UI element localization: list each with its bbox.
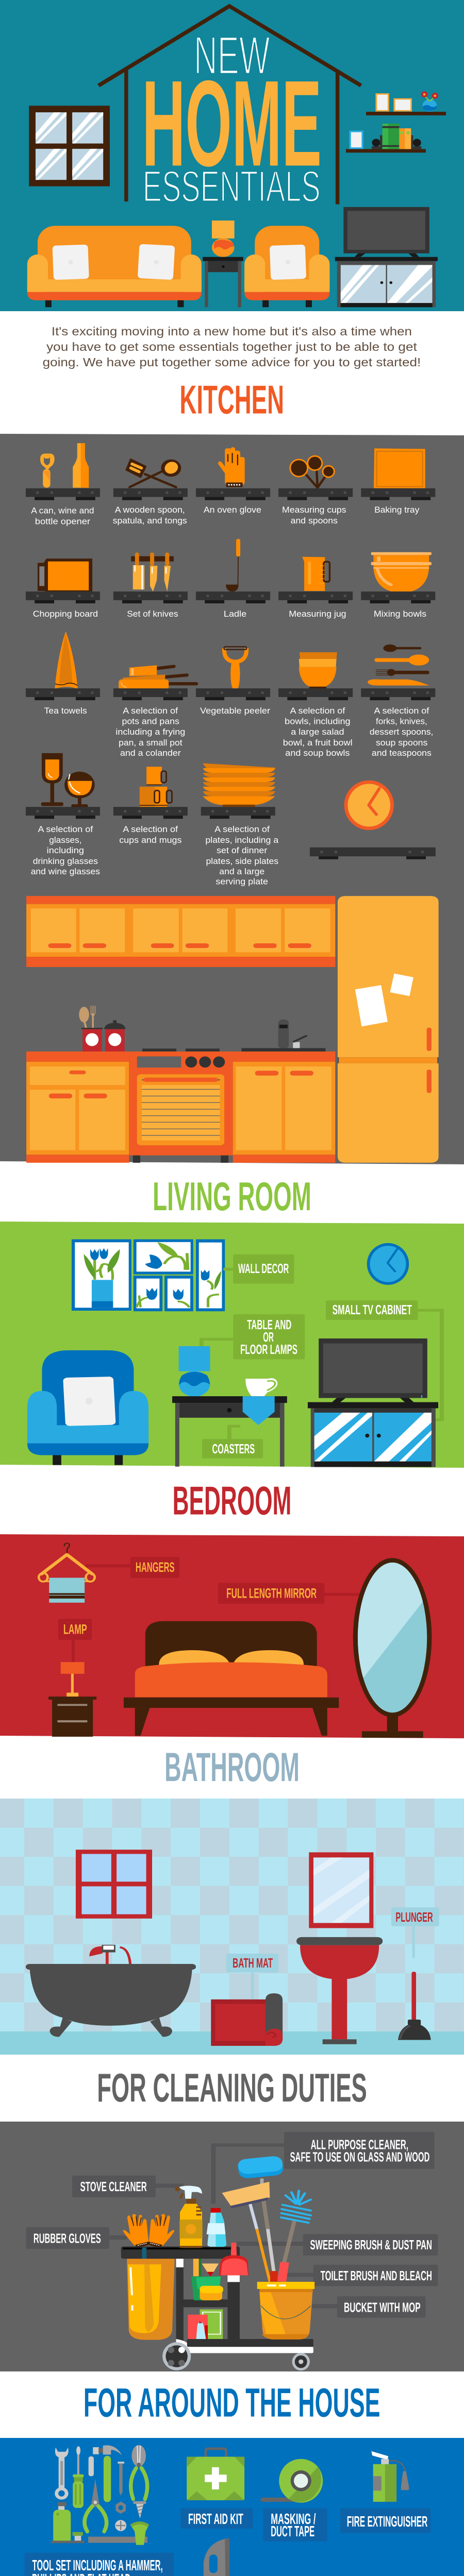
callout: lamp: LAMP [63,1621,87,1637]
section: bathroom illustration [0,1799,464,2055]
label: and spoons [291,516,338,526]
icon: wall art frames [72,1239,225,1311]
title: ESSENTIALS: ESSENTIALS [143,162,321,211]
label: and a colander [120,748,181,758]
label: A selection of [123,706,178,716]
icon: measuring spoons [289,455,335,488]
label: bottle opener [35,517,90,526]
icon: yellow bag [127,2259,175,2340]
icon: cutlery [368,645,429,686]
label: cups and mugs [119,835,181,845]
callout: table and or floor lamps: TABLE AND [247,1317,291,1332]
label [31,506,94,526]
label [370,706,433,758]
label: soup spoons [376,738,427,748]
icon: first aid kit [187,2449,244,2500]
section: bedroom illustration and bathroom heading: HANGERS [136,1560,175,1575]
callout: wall decor [223,1255,294,1284]
label: A selection of [290,706,345,716]
item: can, wine and bottle opener [26,443,100,526]
section: living room illustration and bedroom heading: FLOOR LAMPS [240,1342,297,1357]
icon: stacked plates [203,763,275,807]
label: dessert spoons, [370,727,433,737]
icon: oven [129,1048,233,1163]
label: plates, side plates [206,856,278,866]
icon: towel [55,632,78,689]
icon: sofa [27,226,202,307]
label: Chopping board [33,609,98,619]
icon: full length mirror [353,1558,432,1738]
item: glasses [26,753,100,876]
icon: bleach bottle [207,2208,226,2247]
label: A wooden spoon, [115,505,185,515]
icon: clock [367,1243,409,1285]
callout: coasters [202,1426,263,1459]
icon: ladle [226,539,240,591]
callout: stove cleaner: STOVE CLEANER [80,2179,147,2194]
label: Vegetable peeler [200,706,270,716]
label: Measuring jug [289,609,346,619]
label [31,824,100,876]
intro text [43,325,421,369]
label: a large salad [291,727,344,737]
intro text: you have to get some essentials together just to be able to get [46,341,417,354]
icon: cleaning cart [121,2156,314,2370]
label: and wine glasses [31,867,100,876]
icon: wine glasses [41,753,95,808]
callout: rubber gloves [26,2227,127,2249]
icon: fridge [338,896,439,1163]
callout: rubber gloves: RUBBER GLOVES [34,2231,101,2246]
icon: bowls [371,552,432,591]
item: forks, knives, spoons [361,645,435,758]
label: bowl, a fruit bowl [283,738,353,748]
icon: house outline [98,6,361,204]
section: bathroom illustration: BATH MAT [233,1956,273,1971]
label: Measuring cups [282,505,346,515]
icon: peeler [224,647,246,689]
icon: left base cabinet [26,1052,129,1163]
label: A selection of [38,824,93,834]
callout: masking duct tape: MASKING / [271,2511,316,2527]
label: Set of knives [127,609,178,619]
section: header illustration and kitchen heading [27,6,446,422]
callout: table and or floor lamps [202,1314,305,1360]
icon: lamp on nightstand [48,1662,96,1737]
icon: pedestal sink [296,1937,383,2044]
section: kitchen item grid [26,443,436,887]
section: living room illustration and bedroom heading [27,1239,442,1523]
callout: full length mirror: FULL LENGTH MIRROR [226,1585,317,1601]
panel: around the house background [0,2438,464,2576]
icon: fire extinguisher [371,2451,409,2502]
callout: lamp [58,1619,92,1663]
section: living room illustration and bedroom heading: WALL DECOR [238,1261,289,1276]
item: oven glove [196,447,270,515]
icon: table lamp on side table [203,221,243,307]
icon: tray [374,448,425,488]
label [119,824,181,845]
item: measuring jug [278,557,353,619]
callout: table and or floor lamps: OR [263,1330,274,1345]
icon: shelves with frames, vase and books [346,91,446,152]
intro text: going. We have put together some advice for you to get started! [43,356,421,369]
icon: tv and cabinet [335,207,438,307]
icon: window [29,106,110,187]
callout: fire extinguisher [340,2509,430,2533]
label: Ladle [224,609,246,619]
label [283,706,353,758]
item: ladle [196,539,270,619]
panel: living room background [0,1222,464,1468]
icon: table with lamp, cup and coaster cloth [172,1346,287,1467]
label [282,505,346,526]
icon: tv and cabinet [308,1338,438,1467]
icon: utensil jars [79,1006,125,1052]
label [115,706,185,758]
label: A selection of [214,824,270,834]
section: kitchen illustration and living room heading [26,896,439,1219]
icon: wall clock [344,781,394,830]
icon: window [76,1850,152,1919]
icon: spatula and spoon [126,460,181,487]
icon: bottle opener and wine bottle [40,443,89,488]
item: mixing bowls [361,552,435,619]
icon: mugs [140,767,172,807]
label: plates, including a [205,835,279,845]
icon: blue armchair [27,1350,148,1465]
icon: bed [124,1621,339,1736]
item: cups and mugs [113,767,188,845]
item: vegetable peeler [196,647,270,716]
heading: kitchen: KITCHEN [179,378,284,422]
icon: bucket [257,2282,314,2340]
panel: floor [0,2031,464,2055]
icon: armchair [244,226,329,307]
section: around the house [25,2380,437,2576]
item: chopping board [26,558,100,619]
callout: toilet brush and bleach [287,2265,438,2286]
icon: bathtub [26,1945,196,2037]
label: set of dinner [217,845,268,855]
callout: bucket with mop [312,2296,425,2318]
callout: masking duct tape [263,2509,327,2541]
label: A can, wine and [31,506,94,516]
icon: wall mirror [309,1852,373,1928]
label: including a frying [115,727,185,737]
label: and teaspoons [372,748,432,758]
panel: bedroom background [0,1534,464,1738]
icon: masking tape [260,2459,323,2503]
callout: full length mirror [218,1583,359,1604]
item: measuring cups and spoons [278,455,353,526]
label: forks, knives, [376,717,427,726]
label: A selection of [123,824,178,834]
panel: cleaning background [0,2122,464,2371]
item: baking tray [361,448,435,515]
icon: glove [218,447,245,487]
icon: knives on rack [131,552,174,591]
callout: tool set [25,2553,174,2576]
callout: small tv cabinet [326,1300,442,1420]
icon: spray bottle [175,2185,203,2248]
icon: mop and broom [222,2156,311,2282]
title: NEW: NEW [194,25,270,86]
item: wooden spoon, spatula, tongs [113,460,188,526]
cart top tray [121,2246,240,2259]
icon: rubber gloves [123,2214,175,2248]
callout: masking duct tape: DUCT TAPE [271,2523,314,2539]
item: selection of bowls [278,652,353,758]
label [205,824,279,887]
callout: tool set: TOOL SET INCLUDING A HAMMER, [32,2557,163,2573]
icon: hanger with towel [39,1543,95,1603]
callout: all purpose cleaner [213,2132,435,2204]
callout: bath mat [226,1954,278,1999]
label [113,505,187,526]
label: Tea towels [44,706,87,716]
intro text: It's exciting moving into a new home but it's also a time when [52,325,412,338]
icon: jug [302,557,329,591]
icon: stacked bowls [299,652,337,689]
label: Baking tray [374,505,420,515]
label: serving plate [216,877,268,887]
section: bedroom illustration and bathroom heading [39,1543,432,1790]
callout: first aid kit: FIRST AID KIT [188,2511,243,2527]
label: including [47,845,84,855]
callout: stove cleaner [72,2176,184,2197]
icon: upper cabinets [26,896,335,967]
item: set of knives [113,552,188,619]
icon: plunger [398,1972,431,2040]
section: cleaning [26,2065,438,2370]
cart frame [162,2259,313,2370]
icon: long shelf [310,848,436,859]
callout: plunger [391,1907,439,1958]
label: glasses, [49,835,81,845]
icon: iron and ironing board [185,2538,332,2576]
label: and soup bowls [285,748,350,758]
icon: bath mat [211,1993,283,2046]
label: Mixing bowls [374,609,426,619]
label: pan, a small pot [119,738,183,748]
label: An oven glove [204,505,261,515]
label: spatula, and tongs [113,516,187,526]
callout: first aid kit [180,2509,253,2529]
item: pots and pans [113,665,196,758]
icon: shelf items [188,2259,223,2339]
section: living room illustration and bedroom heading: COASTERS [212,1442,255,1456]
label: pots and pans [122,717,179,726]
panel: header background [0,0,464,311]
icon: sink cabinet [233,1020,335,1163]
panel: kitchen background [0,434,464,1164]
callout: sweeping brush and dust pan [237,2234,438,2256]
label: A selection of [374,706,429,716]
icon: tool set [51,2445,149,2545]
icon: dust pan [219,2243,248,2275]
label: and a large [219,867,264,876]
icon: stacked pans [119,665,196,690]
label: bowls, including [285,717,351,726]
callout: hangers [86,1557,179,1578]
panel: tiled wall [0,1799,464,2031]
icon: board [38,558,92,591]
label: drinking glasses [33,856,98,866]
item: tea towels [26,632,100,716]
item: plates [201,763,279,887]
